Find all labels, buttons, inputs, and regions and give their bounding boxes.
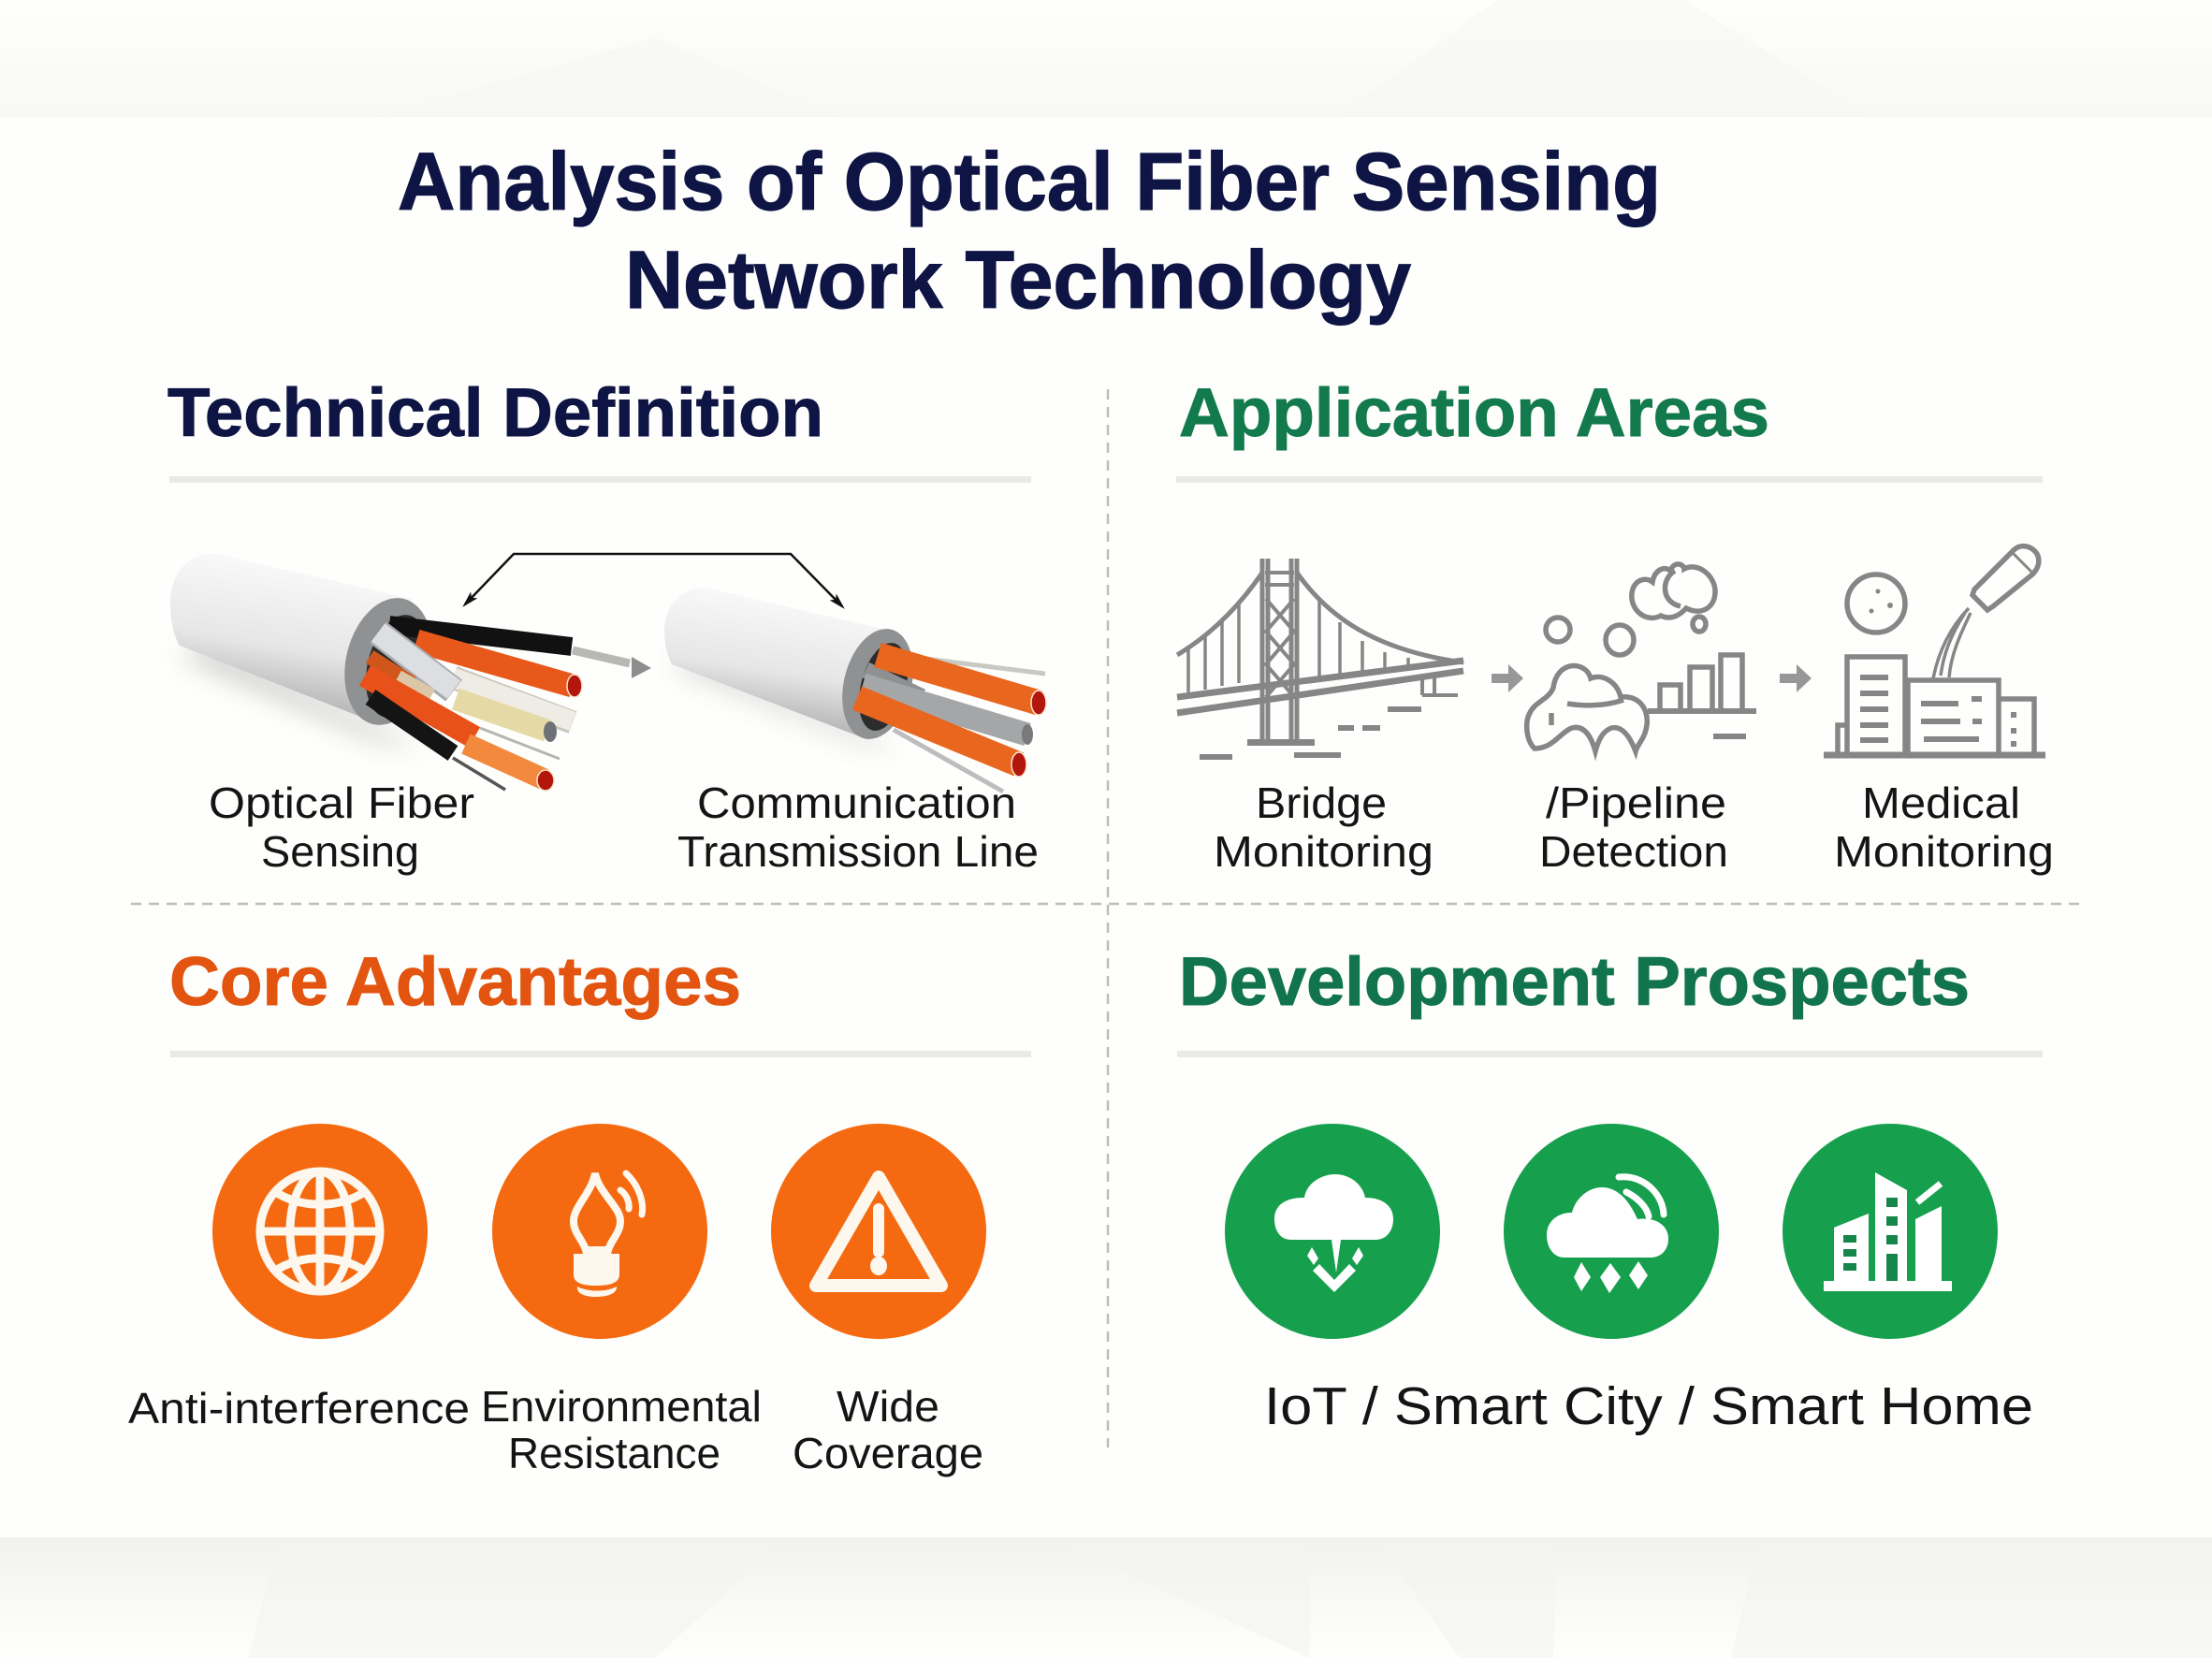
label: medical monitoring: Medical (1862, 778, 2020, 827)
label: anti-interference: Anti-interference (128, 1384, 470, 1433)
heading: core advantages: Core Advantages (169, 944, 741, 1020)
label: iot smart city smart home: IoT / Smart City / Smart Home (1264, 1376, 2033, 1436)
icon: IoT cloud (1225, 1124, 1440, 1339)
panel: technical definition (167, 375, 1046, 876)
icon: bridge (1177, 559, 1463, 757)
panel: core advantages (128, 944, 1031, 1477)
label: bridge monitoring (1214, 778, 1433, 876)
label: communication transmission line (677, 778, 1039, 876)
icon: smart home buildings (1783, 1124, 1998, 1339)
label: wide coverage (793, 1382, 983, 1477)
heading: technical definition: Technical Definition (167, 375, 823, 451)
label: optical fiber sensing: Optical Fiber (209, 778, 474, 827)
label: bridge monitoring: Bridge (1256, 778, 1387, 827)
arrow: pipeline to medical (1780, 664, 1812, 692)
heading rule (1177, 1051, 2043, 1057)
heading rule (170, 1051, 1031, 1057)
illustration: optical fiber sensing cable (170, 554, 630, 791)
icon: flame with signal (492, 1124, 707, 1339)
illustration: communication transmission line cable (664, 588, 1046, 792)
label: bridge monitoring: Monitoring (1214, 827, 1433, 876)
heading: development prospects: Development Prospects (1179, 944, 1970, 1020)
title (398, 137, 1661, 326)
arrow: bridge to pipeline (1492, 664, 1523, 692)
label: pipeline detection (1539, 778, 1728, 876)
label: medical monitoring (1834, 778, 2054, 876)
title: Analysis of Optical Fiber Sensing (398, 137, 1661, 227)
label: wide coverage: Wide (837, 1382, 939, 1431)
label: environmental resistance: Resistance (508, 1429, 720, 1477)
label: pipeline detection: /Pipeline (1546, 778, 1726, 827)
icon: warning triangle (771, 1124, 986, 1339)
label: pipeline detection: Detection (1539, 827, 1728, 876)
heading: application areas: Application Areas (1179, 375, 1769, 451)
label: environmental resistance: Environmental (481, 1382, 762, 1431)
heading rule (1176, 476, 2043, 483)
icon: medical monitoring (1824, 546, 2045, 755)
quadrant dividers (131, 389, 2081, 1447)
label: optical fiber sensing: Sensing (261, 827, 419, 876)
panel: application areas (1176, 375, 2054, 876)
arrow: between cables (632, 657, 651, 678)
label: communication transmission line: Communication (697, 778, 1016, 827)
icon: globe (212, 1124, 428, 1339)
label: wide coverage: Coverage (793, 1429, 983, 1477)
panel: development prospects (1177, 944, 2043, 1436)
icon: pipeline detection (1527, 564, 1756, 751)
arrow: comparison bracket (465, 554, 842, 606)
label: communication transmission line: Transmission Line (677, 827, 1039, 876)
label: medical monitoring: Monitoring (1834, 827, 2054, 876)
icon: smart city cloud (1504, 1124, 1719, 1339)
label: environmental resistance (481, 1382, 762, 1477)
heading rule (169, 476, 1031, 483)
label: optical fiber sensing (209, 778, 474, 876)
title: Network Technology (625, 235, 1411, 326)
